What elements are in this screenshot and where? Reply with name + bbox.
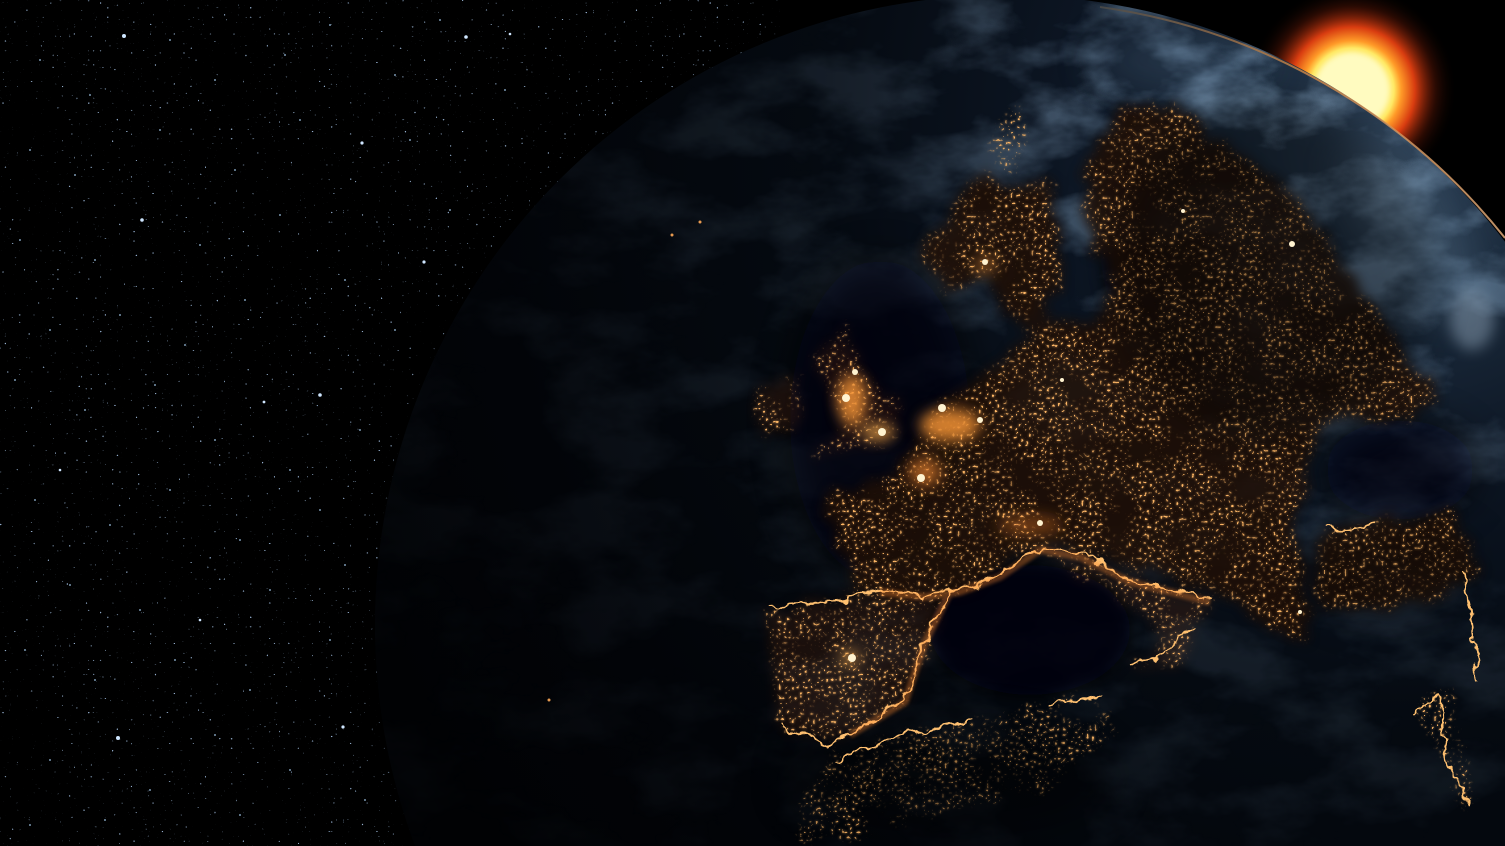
dark land under the lights: [820, 105, 1480, 640]
western isolated lights: [396, 220, 702, 702]
metropolitan glow: [838, 255, 1062, 666]
coastal bright halo: [850, 550, 1210, 735]
land glow: [755, 105, 1480, 745]
bright coastlines: [770, 525, 1478, 805]
cloud and ocean texture: [522, 0, 1505, 820]
dimming over sparsely lit regions: [790, 100, 1480, 835]
atmosphere limb: [1100, 7, 1505, 238]
globe surface: [376, 0, 1505, 846]
city lights: [755, 105, 1480, 846]
sun: [1247, 0, 1457, 195]
globe: [376, 0, 1505, 846]
starfield: [0, 0, 780, 846]
bright cloud bands at the upper right: [790, 30, 1500, 695]
major cities: [842, 209, 1302, 662]
